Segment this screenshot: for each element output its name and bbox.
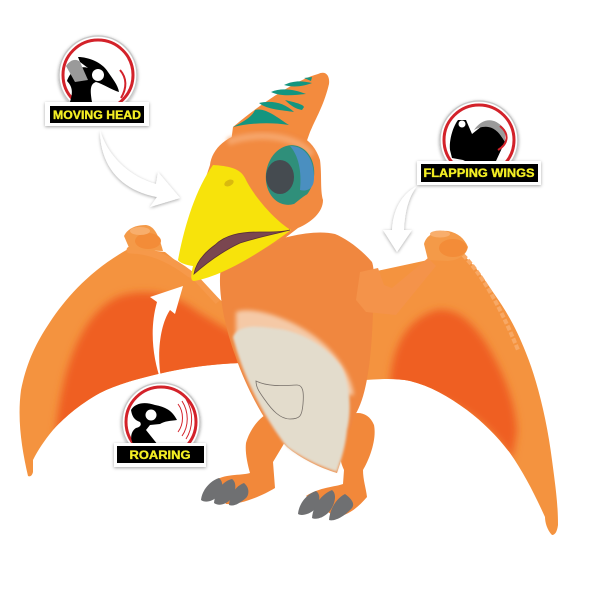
left leg and foot [201, 412, 285, 506]
label: flapping wings: FLAPPING WINGS [424, 168, 535, 180]
badge: roaring [114, 383, 206, 467]
left wing hand [124, 225, 163, 251]
arrow: moving head [100, 130, 180, 207]
infographic: toy pterodactyl with feature callouts [20, 34, 558, 535]
arrow: flapping wings [383, 186, 417, 252]
icon: dinosaur head turning [66, 57, 125, 102]
eye [261, 141, 319, 212]
badge: moving head [45, 36, 149, 126]
right wing [365, 230, 558, 535]
battery door outline [256, 381, 303, 419]
head [178, 73, 329, 281]
belly patch [233, 310, 354, 472]
label: roaring: ROARING [130, 450, 191, 462]
crest stripes [233, 77, 312, 127]
right wing arm [356, 258, 436, 315]
icon: dinosaur roaring [131, 399, 192, 445]
head shape [200, 130, 323, 262]
badge circle [440, 101, 518, 179]
left claws [201, 478, 248, 506]
left wing [20, 225, 245, 476]
nostril [223, 178, 235, 188]
beak [178, 165, 291, 281]
body [220, 232, 436, 473]
badge: flapping wings [417, 101, 541, 185]
right leg and foot [298, 413, 375, 520]
crest [230, 73, 329, 160]
badge circle [122, 383, 200, 461]
right wing hand [424, 230, 468, 261]
mouth [194, 230, 290, 274]
arrow: roaring [150, 286, 183, 384]
icon: dinosaur flapping wings [450, 120, 507, 161]
badge circle [59, 36, 137, 114]
right claws [298, 490, 353, 520]
label: moving head: MOVING HEAD [53, 110, 141, 122]
